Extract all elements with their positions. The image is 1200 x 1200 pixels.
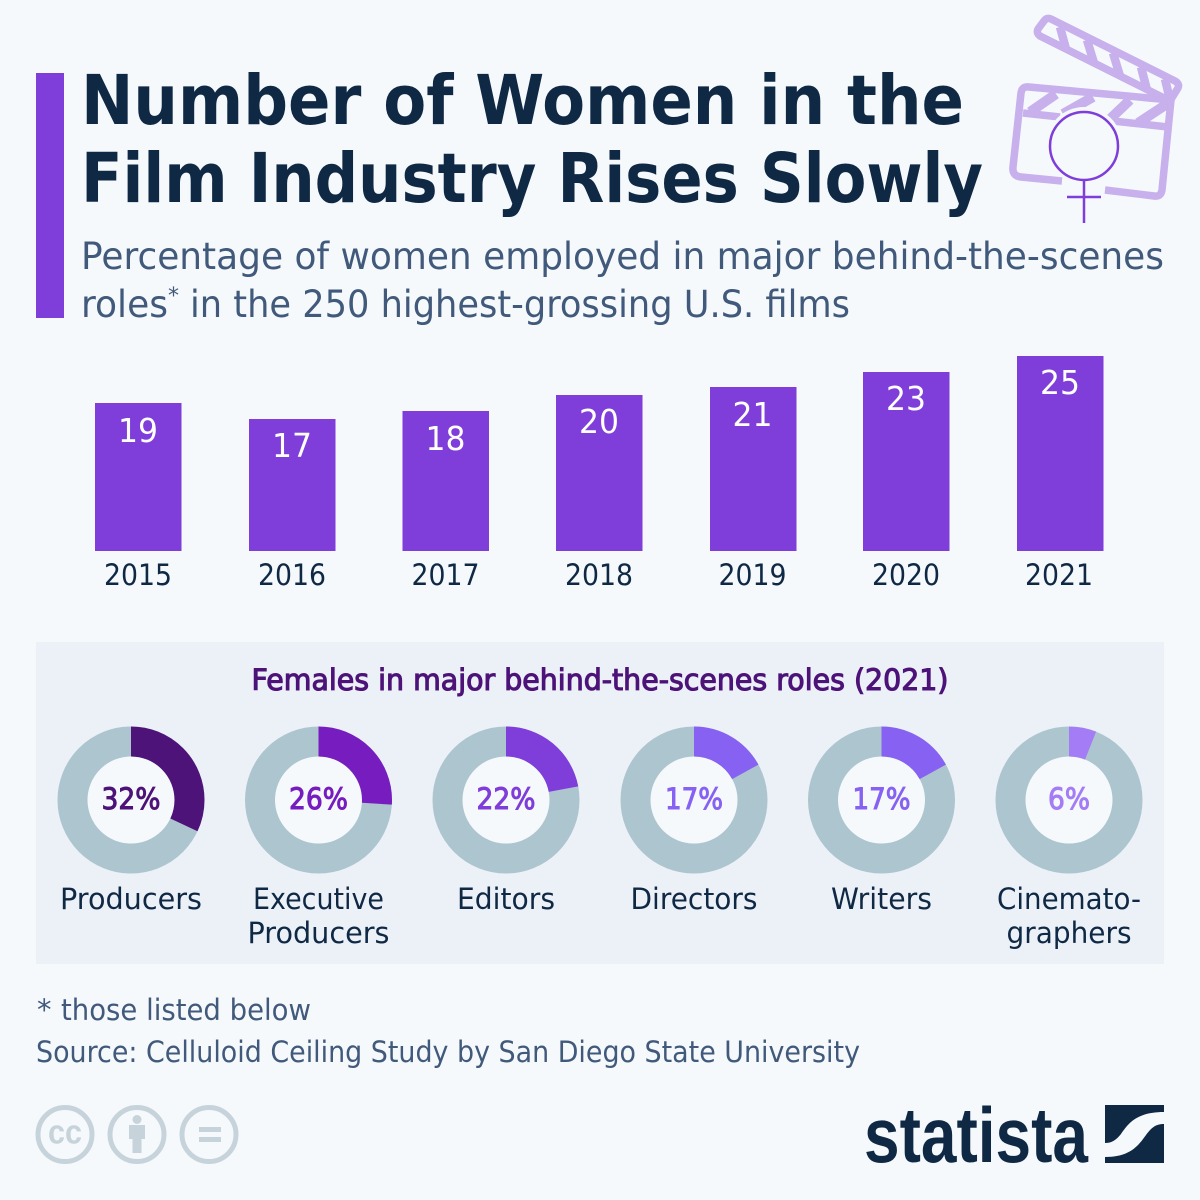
- bar chart: [95, 356, 1104, 592]
- bar chart: 17: [272, 426, 312, 465]
- footnote and source: those listed below: [61, 993, 311, 1027]
- bar chart: 21: [732, 395, 772, 434]
- subtitle: *: [168, 284, 179, 309]
- bar chart: 20: [579, 402, 619, 441]
- donut: Cinematographers: 6%: [1048, 782, 1090, 816]
- bar chart: 2017: [412, 558, 480, 592]
- bar chart: 18: [426, 419, 466, 458]
- donut: Directors: [630, 742, 758, 916]
- bar chart: 19: [118, 411, 158, 450]
- title accent bar: [36, 73, 64, 318]
- donut: Editors: 22%: [476, 782, 536, 816]
- title: [81, 61, 983, 219]
- title: Number of Women in the: [81, 61, 964, 141]
- bar chart: 2020: [872, 558, 940, 592]
- statista logo: statista: [864, 1091, 1088, 1179]
- donut: Executive Producers: Producers: [248, 916, 390, 950]
- donut: Writers: [823, 742, 940, 916]
- bar chart: 2015: [104, 558, 172, 592]
- icon: cc license: cc: [48, 1114, 82, 1152]
- subtitle: Percentage of women employed in major behind-the-scenes: [81, 235, 1164, 278]
- bar chart: 2016: [258, 558, 326, 592]
- donut: Editors: [448, 742, 564, 916]
- icon: cc license: [38, 1108, 236, 1162]
- bar chart: 2018: [565, 558, 633, 592]
- panel: female roles: [36, 642, 1164, 964]
- donut: Directors: Directors: [630, 882, 758, 916]
- panel heading: Females in major behind-the-scenes roles (2021): [252, 663, 948, 697]
- footnote and source: *: [37, 993, 52, 1027]
- donut: Writers: 17%: [852, 782, 910, 816]
- donut: Directors: 17%: [665, 782, 723, 816]
- subtitle: [81, 235, 1164, 326]
- bar chart: 23: [886, 379, 926, 418]
- bar chart: 2021: [1025, 558, 1093, 592]
- donut: Cinematographers: Cinemato-: [997, 882, 1141, 916]
- donut: Editors: Editors: [457, 882, 555, 916]
- donut: Writers: Writers: [831, 882, 932, 916]
- subtitle: in the 250 highest-grossing U.S. films: [190, 283, 850, 326]
- donut: Executive Producers: Executive: [253, 882, 384, 916]
- donut: Cinematographers: graphers: [1006, 916, 1132, 950]
- icon: statista mark: [1105, 1105, 1164, 1163]
- title: Film Industry Rises Slowly: [81, 139, 983, 219]
- bar chart: 2019: [718, 558, 786, 592]
- donut: Producers: [60, 742, 202, 916]
- icon: clapperboard with female symbol: [1013, 18, 1179, 223]
- donut: Producers: 32%: [102, 782, 160, 816]
- donut: Cinematographers: [997, 742, 1141, 950]
- footnote and source: Source: Celluloid Ceiling Study by San Diego State University: [36, 1035, 860, 1069]
- footnote and source: [36, 993, 860, 1069]
- donut: Executive Producers: [248, 742, 390, 950]
- donut: Producers: Producers: [60, 882, 202, 916]
- bar chart: 25: [1040, 363, 1080, 402]
- subtitle: roles: [81, 283, 168, 326]
- donut: Executive Producers: 26%: [289, 782, 348, 816]
